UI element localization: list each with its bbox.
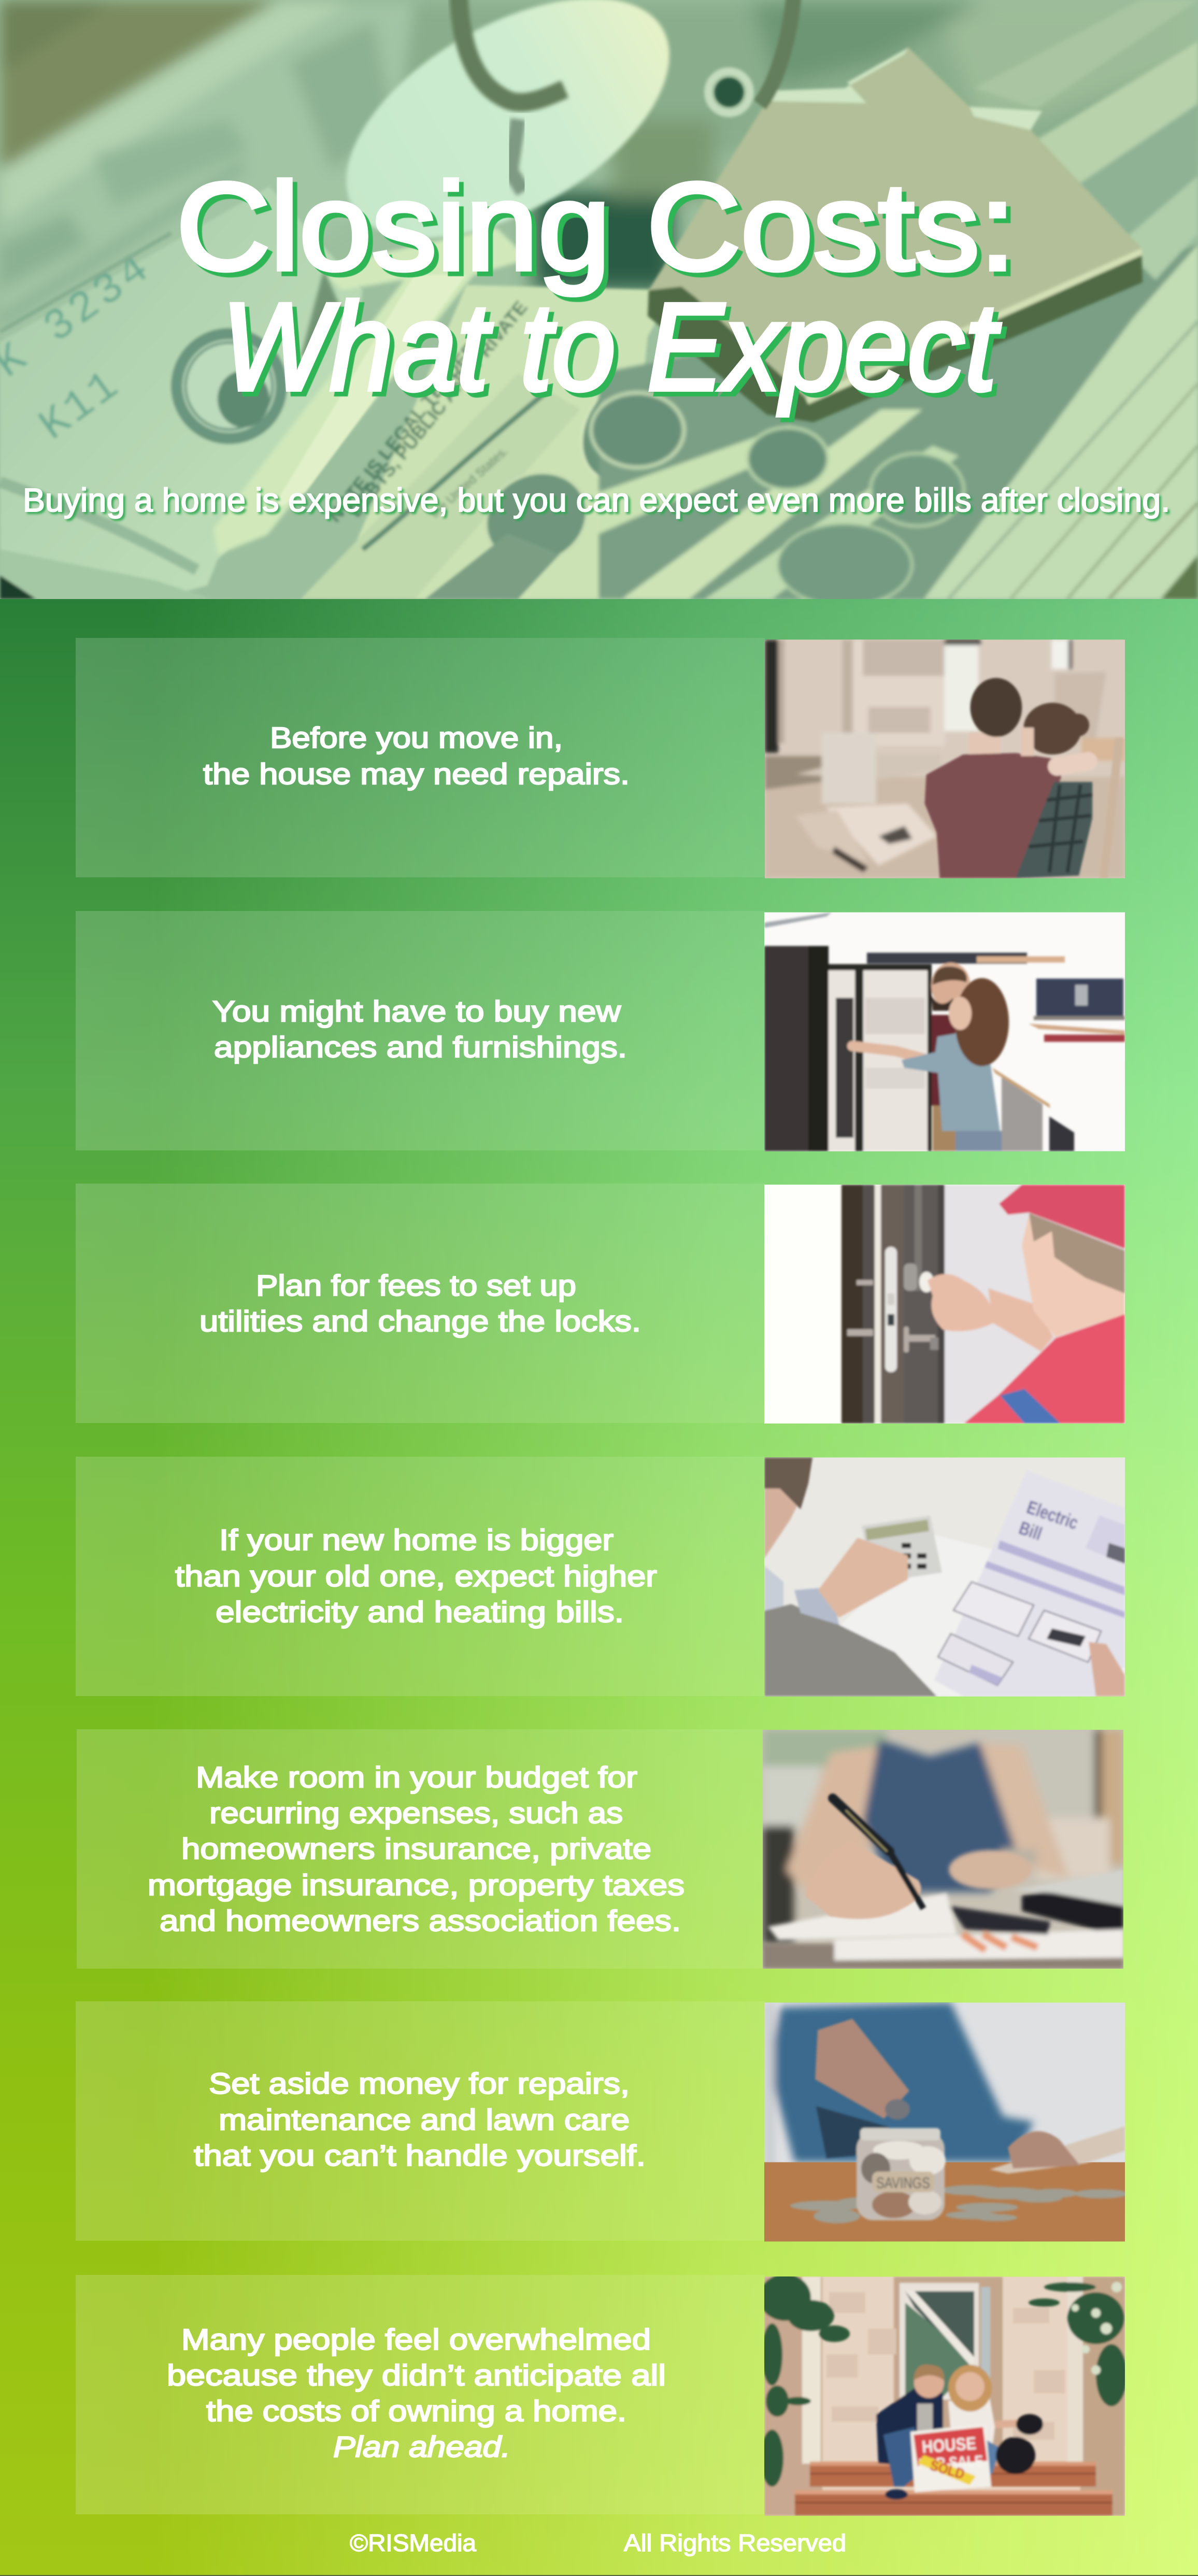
key head and ring	[213, 0, 709, 554]
panel: savings for repairs	[76, 2001, 765, 2241]
text: bigger home bills: than your old one, expect higher	[175, 1560, 657, 1593]
panel: appliances	[76, 911, 765, 1150]
text: bigger home bills	[175, 1524, 657, 1629]
photo: couple with sold sign on porch: FOR SALE	[918, 2453, 983, 2473]
panel: plan ahead	[76, 2275, 765, 2514]
hero photo: keys on dollar bills	[0, 0, 1198, 599]
photo: woman writing at a table	[763, 1730, 1123, 1969]
footer copyright: All Rights Reserved	[624, 2529, 846, 2556]
text: appliances: You might have to buy new	[212, 995, 621, 1028]
photo: couple in a house under renovation	[765, 639, 1125, 878]
text: bigger home bills: If your new home is bigger	[219, 1524, 614, 1557]
lower bill beneath the key: the United States.	[428, 444, 511, 520]
text: repairs: the house may need repairs.	[203, 758, 630, 791]
text: repairs: Before you move in,	[270, 721, 563, 755]
text: utilities and locks: Plan for fees to set up	[256, 1269, 576, 1302]
photo: couple with sold sign on porch	[764, 2276, 1125, 2516]
bill seal	[171, 328, 287, 444]
text: savings for repairs: that you can’t handle yourself.	[194, 2139, 646, 2172]
photo: locksmith at a door	[764, 1185, 1125, 1424]
house-shaped key fob	[648, 0, 1143, 422]
photo: man with calculator and electric bill: Bill	[1016, 1517, 1045, 1544]
page background gradient	[0, 599, 1198, 2576]
photo: couple with sold sign on porch: SOLD	[928, 2457, 966, 2482]
right bills stack	[591, 0, 1198, 606]
text: plan ahead: Plan ahead.	[333, 2430, 510, 2464]
hero title: Closing Costs:	[176, 157, 1016, 296]
text: repairs	[203, 721, 630, 791]
hero title: What to Expect	[222, 277, 1001, 416]
text: bigger home bills: electricity and heating bills.	[216, 1596, 624, 1629]
text: recurring expenses: homeowners insurance, private	[181, 1832, 651, 1866]
panel: recurring expenses	[77, 1729, 764, 1969]
hero subtitle: Buying a home is expensive, but you can expect even more bills after closing.	[23, 481, 1170, 519]
footer copyright	[350, 2529, 846, 2556]
text: recurring expenses: recurring expenses, such as	[209, 1797, 623, 1830]
text: plan ahead: because they didn’t anticipate all	[167, 2359, 666, 2392]
text: utilities and locks	[199, 1269, 641, 1338]
left bill front: K11	[31, 360, 131, 451]
panel: utilities and locks	[76, 1184, 765, 1423]
text: recurring expenses: mortgage insurance, property taxes	[148, 1869, 684, 1902]
text: plan ahead: the costs of owning a home.	[206, 2395, 626, 2428]
text: plan ahead	[167, 2323, 666, 2464]
text: appliances: appliances and furnishings.	[214, 1031, 627, 1064]
lower bill beneath the key: NOTE IS LEGAL TENDER	[323, 338, 481, 526]
panel: repairs	[76, 638, 765, 877]
photo: couple with sold sign on porch: HOUSE	[921, 2433, 977, 2457]
text: savings for repairs	[194, 2067, 646, 2172]
footer copyright: ©RISMedia	[350, 2529, 476, 2556]
text: appliances	[212, 995, 627, 1064]
text: recurring expenses	[148, 1761, 684, 1938]
panel: bigger home bills	[76, 1457, 765, 1696]
photo: coin going into savings jar	[764, 2002, 1125, 2242]
lower bill beneath the key	[301, 285, 678, 599]
text: plan ahead: Many people feel overwhelmed	[181, 2323, 651, 2356]
text: savings for repairs: maintenance and lawn care	[219, 2103, 630, 2137]
text: recurring expenses: and homeowners association fees.	[160, 1904, 681, 1938]
hero title	[176, 157, 1016, 416]
text: utilities and locks: utilities and change the locks.	[199, 1305, 641, 1338]
left bill front	[0, 187, 363, 599]
text: savings for repairs: Set aside money for repairs,	[209, 2067, 630, 2100]
photo: man with calculator and electric bill: Electric	[1024, 1496, 1081, 1533]
photo: couple shopping for a refrigerator	[764, 912, 1125, 1151]
photo: man with calculator and electric bill	[764, 1457, 1125, 1697]
lower bill beneath the key: DEBTS, PUBLIC AND PRIVATE	[344, 297, 532, 521]
photo: coin going into savings jar: SAVINGS	[876, 2174, 930, 2192]
text: recurring expenses: Make room in your budget for	[196, 1761, 637, 1794]
